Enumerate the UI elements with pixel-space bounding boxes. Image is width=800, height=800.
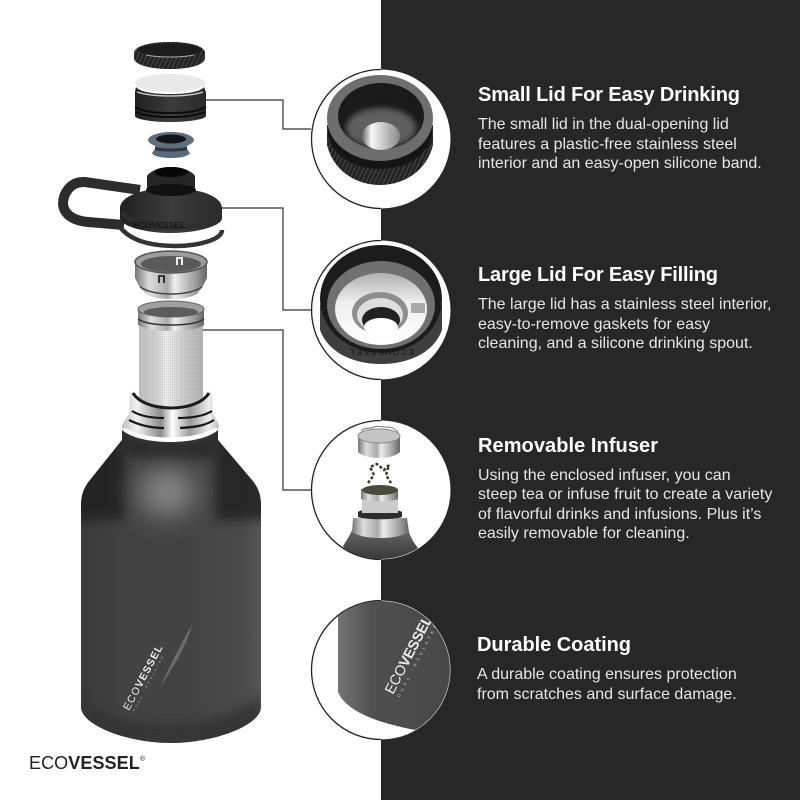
feature text: small lid: interior and an easy-open silicone band. [478, 155, 762, 172]
large lid with loop [63, 167, 222, 246]
bottle neck threads [122, 390, 219, 440]
lid cap [120, 190, 222, 233]
bottle swoosh [160, 625, 192, 688]
brand logo: ECOVESSEL [29, 753, 140, 773]
carry loop [63, 182, 140, 225]
infuser mesh basket [138, 301, 204, 407]
connector lines [203, 100, 311, 490]
circle: large lid detail: ECOVESSEL [350, 347, 414, 357]
feature text: durable coating: from scratches and surface damage. [477, 686, 737, 703]
gasket [148, 132, 194, 158]
feature text: large lid: cleaning, and a silicone drinking spout. [478, 335, 753, 352]
feature text: removable infuser: Using the enclosed infuser, you can [478, 467, 731, 484]
feature text: durable coating: A durable coating ensures protection [477, 666, 737, 683]
feature text: removable infuser: Removable Infuser [478, 435, 658, 457]
feature text: small lid [478, 84, 762, 172]
bottle logo: ECOVESSEL [121, 643, 166, 712]
bottle body [81, 430, 261, 743]
feature text: large lid: easy-to-remove gaskets for easy [478, 316, 710, 333]
circle: durable coating detail: DUAL INSULATED [396, 621, 439, 698]
background panel: white left side [0, 0, 381, 800]
bottle logo: DUAL INSULATED [132, 653, 166, 712]
small lid [135, 74, 206, 122]
circle: removable infuser detail [312, 420, 450, 565]
circle: durable coating detail: ECOVESSEL [382, 613, 436, 697]
feature text: small lid: Small Lid For Easy Drinking [478, 84, 740, 106]
background panel: dark right side [381, 0, 800, 800]
feature text: small lid: features a plastic-free stainless steel [478, 136, 737, 153]
infuser cap [135, 251, 207, 299]
circle: small lid detail [312, 70, 450, 208]
feature text: small lid: The small lid in the dual-opening lid [478, 116, 729, 133]
circle: durable coating detail [312, 595, 455, 740]
feature text: removable infuser: steep tea or infuse fruit to create a variety [478, 486, 772, 503]
exploded bottle illustration [63, 42, 272, 745]
feature text: removable infuser: easily removable for cleaning. [478, 525, 690, 542]
feature text: large lid: Large Lid For Easy Filling [478, 264, 718, 286]
feature text: durable coating: Durable Coating [477, 634, 631, 656]
brand logo: ® [140, 755, 146, 763]
lid spout [147, 167, 195, 198]
feature text: large lid: The large lid has a stainless steel interior, [478, 296, 771, 313]
feature text: removable infuser [478, 435, 772, 542]
feature text: removable infuser: of flavorful drinks and infusions. Plus it’s [478, 506, 761, 523]
retaining ring [120, 227, 222, 246]
silicone band [134, 42, 205, 69]
large lid with loop: ECOVESSEL [133, 220, 185, 230]
circle: large lid detail [312, 240, 450, 380]
feature text: durable coating [477, 634, 737, 703]
feature text: large lid [478, 264, 771, 352]
